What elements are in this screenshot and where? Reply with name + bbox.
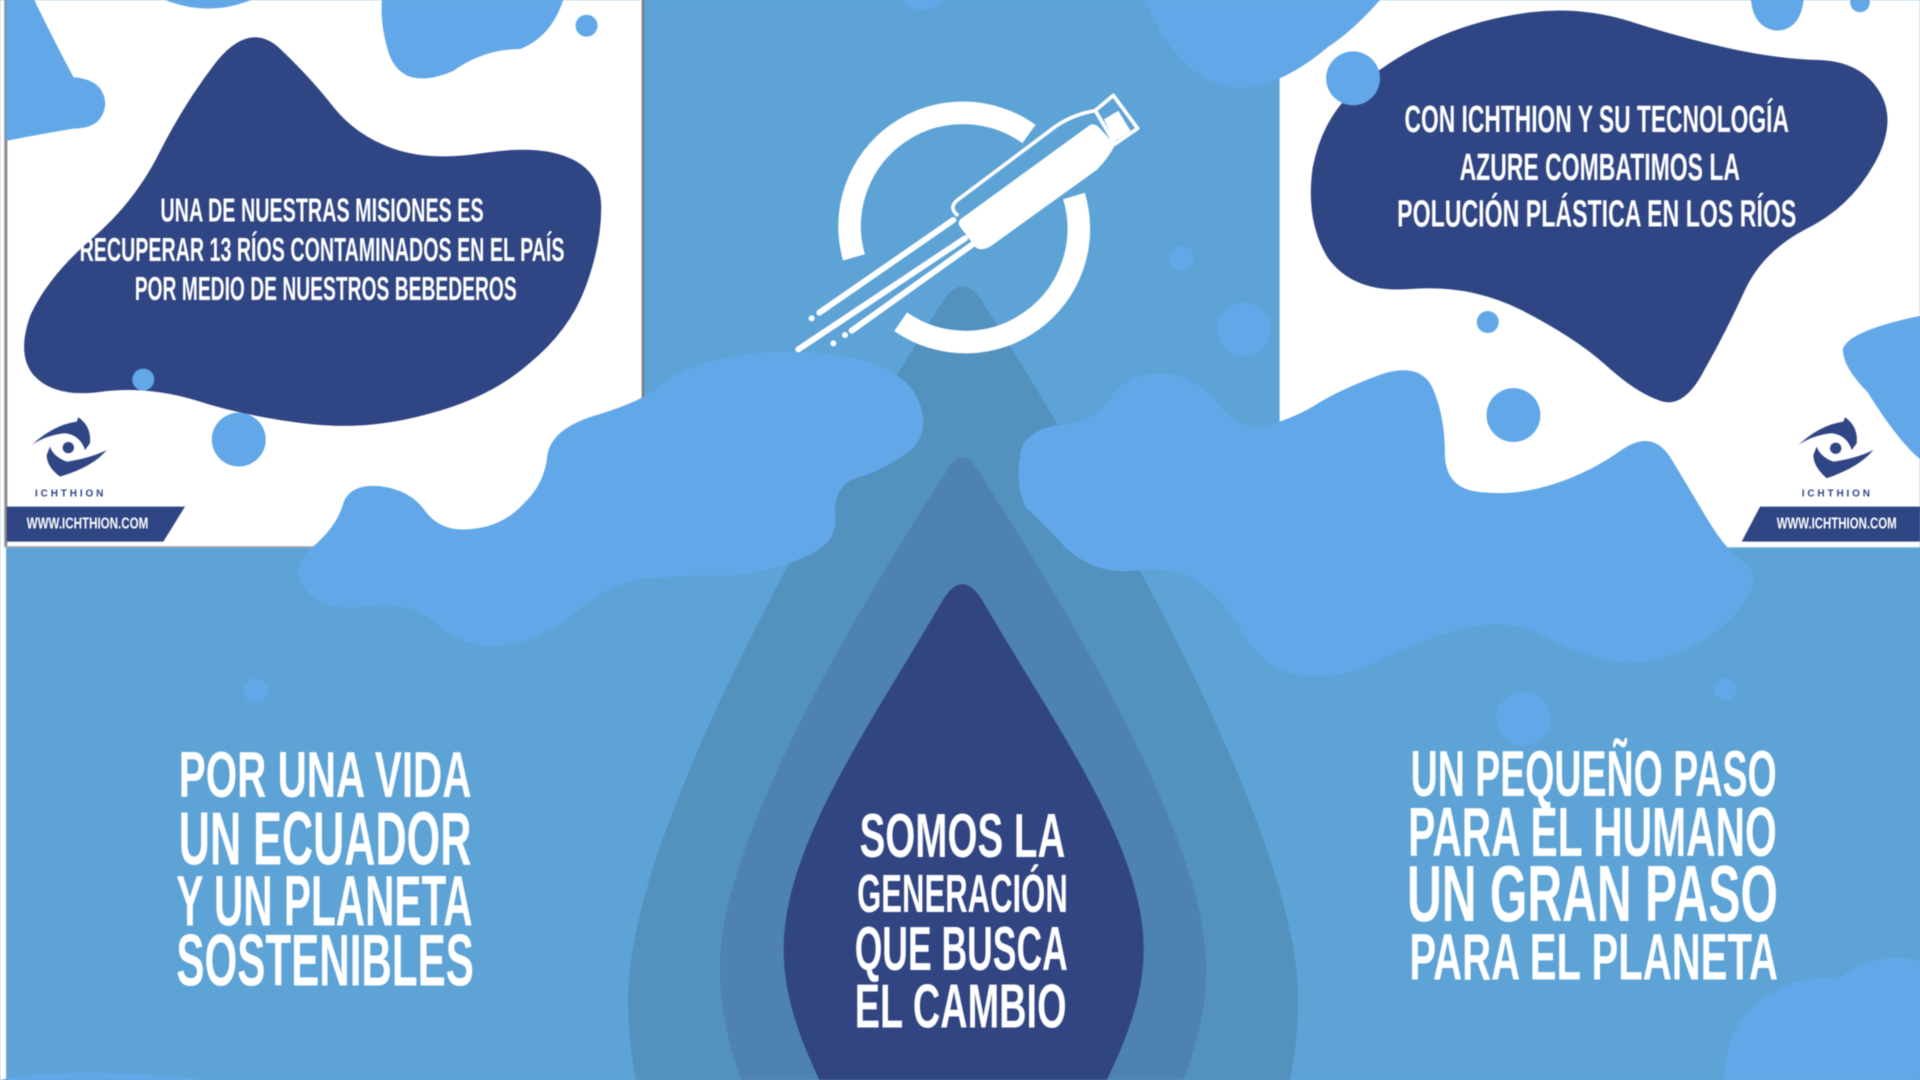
- text block: right bubble message: [1397, 97, 1796, 236]
- text block: left bubble message: RECUPERAR 13 RÍOS CONTAMINADOS EN EL PAÍS: [80, 231, 564, 269]
- panel: top left white card: [4, 0, 644, 548]
- cloud: right: [1018, 370, 1754, 676]
- logo: left Ichthion eye and URL band: ICHTHION: [35, 489, 103, 500]
- text block: bottom left slogan: POR UNA VIDA: [179, 738, 471, 811]
- icon: rocket and ring: [798, 95, 1138, 349]
- text block: center drop slogan: GENERACIÓN: [857, 864, 1068, 924]
- text block: bottom left slogan: [176, 738, 474, 1002]
- logo: right Ichthion eye and URL band: ICHTHION: [1802, 489, 1870, 500]
- logo: left Ichthion eye and URL band: [7, 417, 185, 542]
- water drop: inner layer: [784, 584, 1144, 1080]
- water drop: middle layer: [720, 457, 1206, 1080]
- text block: right bubble message: AZURE COMBATIMOS LA: [1460, 147, 1740, 189]
- dot on right bubble: [1326, 51, 1380, 105]
- panel: top right white card: [1280, 0, 1920, 547]
- text block: bottom left slogan: Y UN PLANETA: [176, 863, 473, 942]
- dot on left bubble: [132, 369, 154, 391]
- water drop: outer layer: [628, 287, 1298, 1080]
- text block: left bubble message: [80, 193, 564, 308]
- text block: center drop slogan: QUE BUSCA: [855, 914, 1068, 984]
- cloud: left: [298, 351, 923, 646]
- text block: center drop slogan: SOMOS LA: [860, 801, 1065, 871]
- text block: bottom right slogan: [1407, 737, 1778, 995]
- logo: left Ichthion eye and URL band: WWW.ICHTHION.COM: [27, 516, 148, 533]
- left page margin: [0, 0, 6, 1080]
- logo: right Ichthion eye and URL band: [1742, 417, 1920, 542]
- text block: center drop slogan: [855, 801, 1068, 1041]
- text block: bottom left slogan: SOSTENIBLES: [176, 919, 474, 1002]
- text block: center drop slogan: EL CAMBIO: [855, 971, 1067, 1041]
- text block: left bubble message: POR MEDIO DE NUESTROS BEBEDEROS: [135, 271, 517, 308]
- blob: left dark text bubble: [24, 37, 601, 426]
- blob: right dark text bubble: [1311, 10, 1887, 402]
- text block: bottom left slogan: UN ECUADOR: [179, 796, 471, 880]
- text block: left bubble message: UNA DE NUESTRAS MISIONES ES: [160, 193, 484, 230]
